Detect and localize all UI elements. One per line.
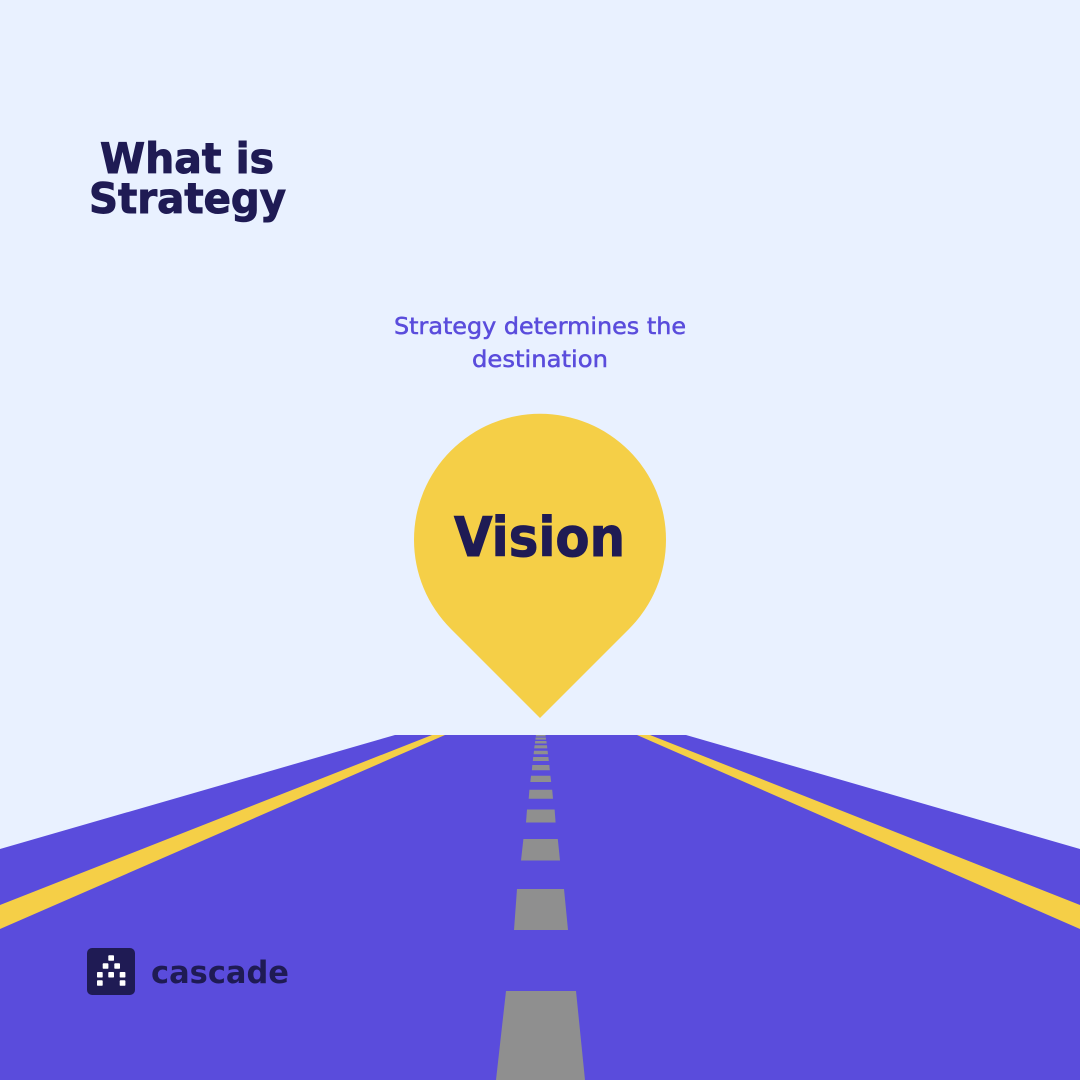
title [89,134,286,223]
cascade logo [87,948,289,995]
subtitle text [394,314,686,373]
road [0,735,1080,1080]
pin label: Vision [454,506,625,569]
subtitle text: destination [472,347,608,373]
icon: cascade logo mark [87,948,135,995]
logo wordmark: cascade [151,955,289,991]
title: What is [100,134,274,183]
right yellow road line [637,735,1080,929]
centre lane dashes [496,735,585,1080]
icon: vision map pin [414,414,666,718]
title: Strategy [89,174,286,223]
subtitle text: Strategy determines the [394,314,686,340]
left yellow road line [0,735,445,929]
